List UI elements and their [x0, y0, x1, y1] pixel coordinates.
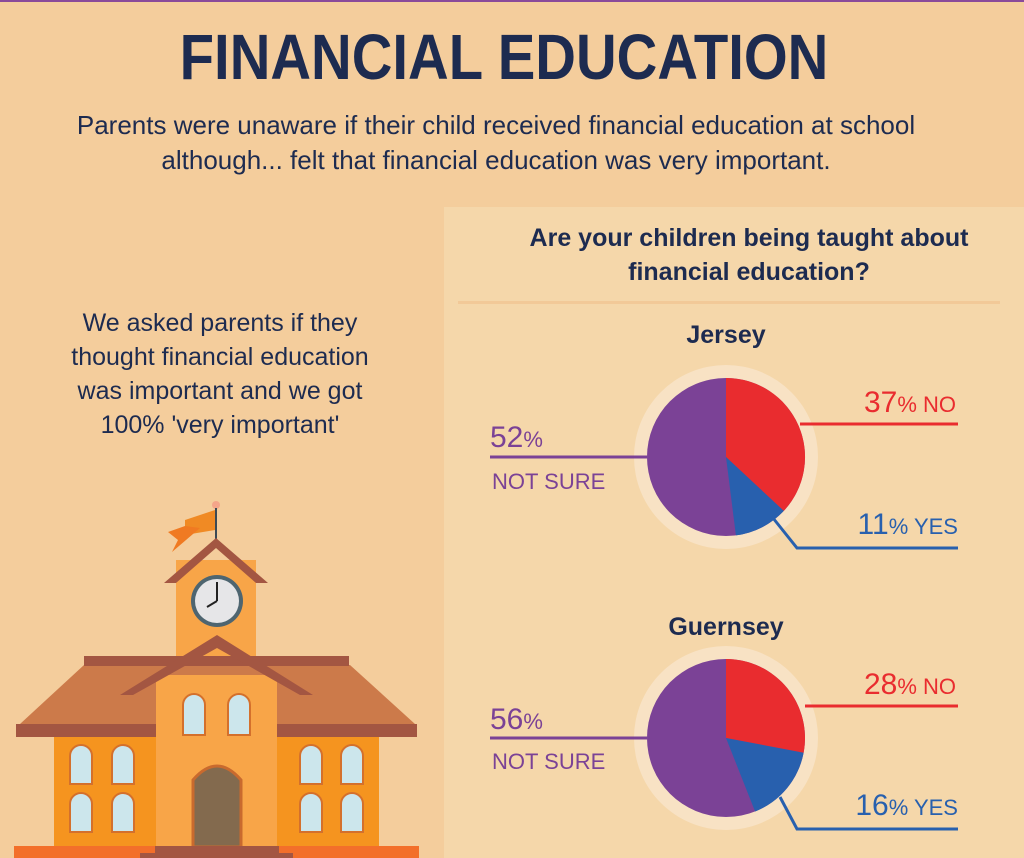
guernsey labels: 28% NO	[864, 668, 956, 701]
left text: We asked parents if they thought financial education was important and we got 100% 'very important'	[71, 309, 369, 439]
jersey labels: 37% NO	[864, 386, 956, 419]
label Guernsey: Guernsey	[668, 613, 784, 641]
label Jersey: Jersey	[686, 321, 766, 349]
text: 11% YES	[858, 508, 958, 541]
text: 16% YES	[855, 789, 958, 822]
title: FINANCIAL EDUCATION	[180, 21, 828, 93]
right panel	[444, 207, 1024, 858]
text: NOT SURE	[492, 469, 605, 494]
text: NOT SURE	[492, 749, 605, 774]
school illustration	[14, 501, 419, 858]
subtitle: Parents were unaware if their child received financial education at school although... felt that financial education was very important.	[77, 110, 915, 175]
text: 52%	[490, 421, 543, 454]
jersey pie	[490, 365, 958, 549]
panel heading: Are your children being taught about financial education?	[530, 224, 968, 286]
text: 56%	[490, 703, 543, 736]
guernsey pie	[490, 646, 958, 830]
